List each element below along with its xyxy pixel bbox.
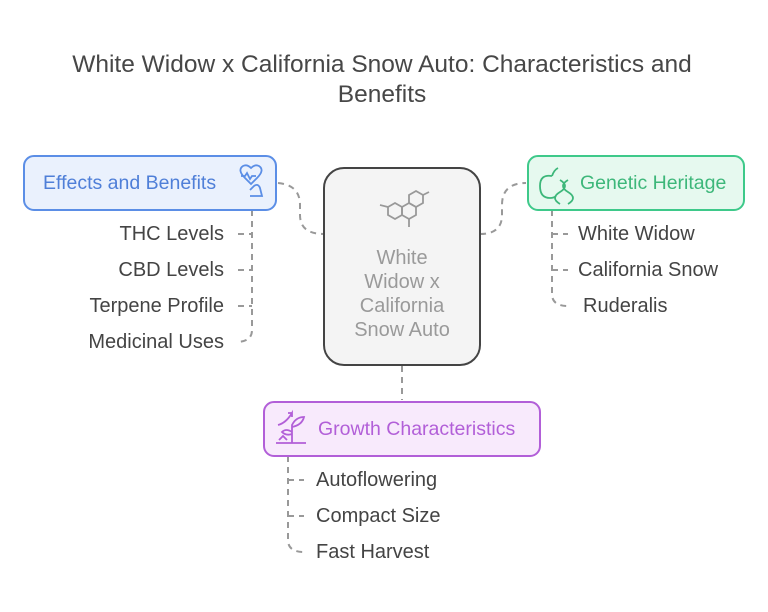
panel: effects and benefits	[24, 156, 276, 210]
panel: genetic heritage: Genetic Heritage	[580, 172, 726, 194]
panel: center: White	[376, 247, 428, 269]
title: White Widow x California Snow Auto: Characteristics and	[72, 51, 692, 78]
list: growth items	[316, 469, 440, 563]
list: effects items	[88, 223, 224, 353]
panel: effects and benefits: Effects and Benefits	[43, 172, 216, 194]
title: Benefits	[338, 81, 426, 108]
list: effects items: Medicinal Uses	[88, 331, 224, 353]
list: effects items: CBD Levels	[118, 259, 224, 281]
panel: growth characteristics	[264, 402, 540, 456]
panel: growth characteristics: Growth Characteristics	[318, 418, 515, 440]
list: growth items: Fast Harvest	[316, 541, 430, 563]
list: genetic items	[578, 223, 719, 317]
list: genetic items: Ruderalis	[583, 295, 667, 317]
panel: center: Snow Auto	[354, 319, 450, 341]
icon: molecule	[380, 191, 429, 227]
list: effects items: Terpene Profile	[89, 295, 224, 317]
list: genetic items: White Widow	[578, 223, 695, 245]
list: growth items: Compact Size	[316, 505, 440, 527]
title	[72, 51, 692, 108]
connectors	[236, 183, 568, 552]
icon: heart hand	[240, 165, 262, 196]
list: genetic items: California Snow	[578, 259, 719, 281]
panel: center: Widow x	[364, 271, 440, 293]
panel: genetic heritage	[528, 156, 744, 210]
icon: apple dna	[540, 168, 573, 204]
icon: plant growth	[276, 413, 306, 443]
panel: center: California	[360, 295, 445, 317]
list: effects items: THC Levels	[120, 223, 224, 245]
panel: center	[324, 168, 480, 365]
list: growth items: Autoflowering	[316, 469, 437, 491]
